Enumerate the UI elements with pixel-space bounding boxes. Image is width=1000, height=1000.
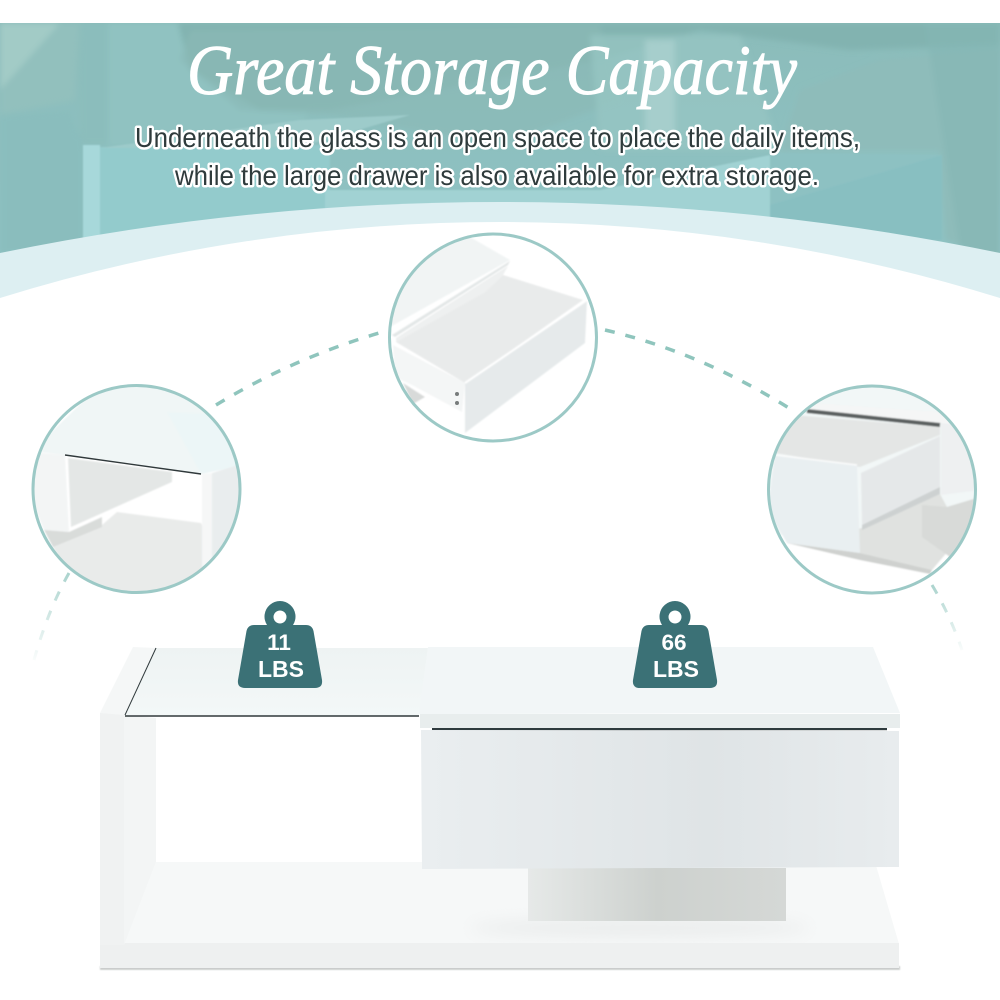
table: right top front edge: [420, 714, 900, 728]
weight badge: 66 LBS: 66: [661, 630, 687, 655]
coffee table: [100, 647, 900, 970]
weight badge: 66 LBS: LBS: [653, 656, 699, 682]
table: glass top: [124, 648, 428, 716]
weight badge: 11 LBS: 11: [267, 630, 291, 655]
table: drawer gap line: [432, 728, 887, 730]
dashed connector: left circle down to table: [34, 573, 69, 660]
weight badge: 66 LBS: [633, 601, 717, 688]
table: base shelf front: [100, 943, 899, 968]
table: central support post: [528, 868, 786, 921]
table: floor shadow: [100, 966, 900, 970]
detail circle: drawer from the side: [765, 382, 980, 600]
weight badge: 11 LBS: [238, 601, 322, 688]
table: right top surface: [419, 647, 900, 714]
table: drawer front: [421, 730, 899, 869]
table: soft shadow under drawer: [470, 919, 810, 937]
dashed connector: top circle to right circle: [605, 330, 792, 410]
description text: Underneath the glass is an open space to place the daily items,: [135, 122, 860, 153]
detail circle: glass shelf: [30, 380, 245, 600]
description text: while the large drawer is also available for extra storage.: [174, 160, 819, 191]
table: left upright side: [124, 715, 156, 945]
dashed connector: left circle to top circle: [216, 331, 386, 405]
table: left upright front: [100, 713, 124, 945]
decorative arc: pale teal band: [0, 202, 1000, 300]
title: Great Storage Capacity: [187, 32, 797, 110]
dashed connector: right circle down to table: [932, 585, 962, 650]
banner: blurred living-room photo: [0, 23, 1000, 263]
table: base shelf top: [124, 862, 899, 944]
detail circle: open drawer from above: [385, 230, 601, 445]
table: left top slab: [100, 647, 156, 715]
description text: [135, 122, 860, 191]
weight badge: 11 LBS: LBS: [258, 656, 304, 682]
table: glass edges: [125, 648, 419, 716]
white content area arc: [0, 222, 1000, 1000]
